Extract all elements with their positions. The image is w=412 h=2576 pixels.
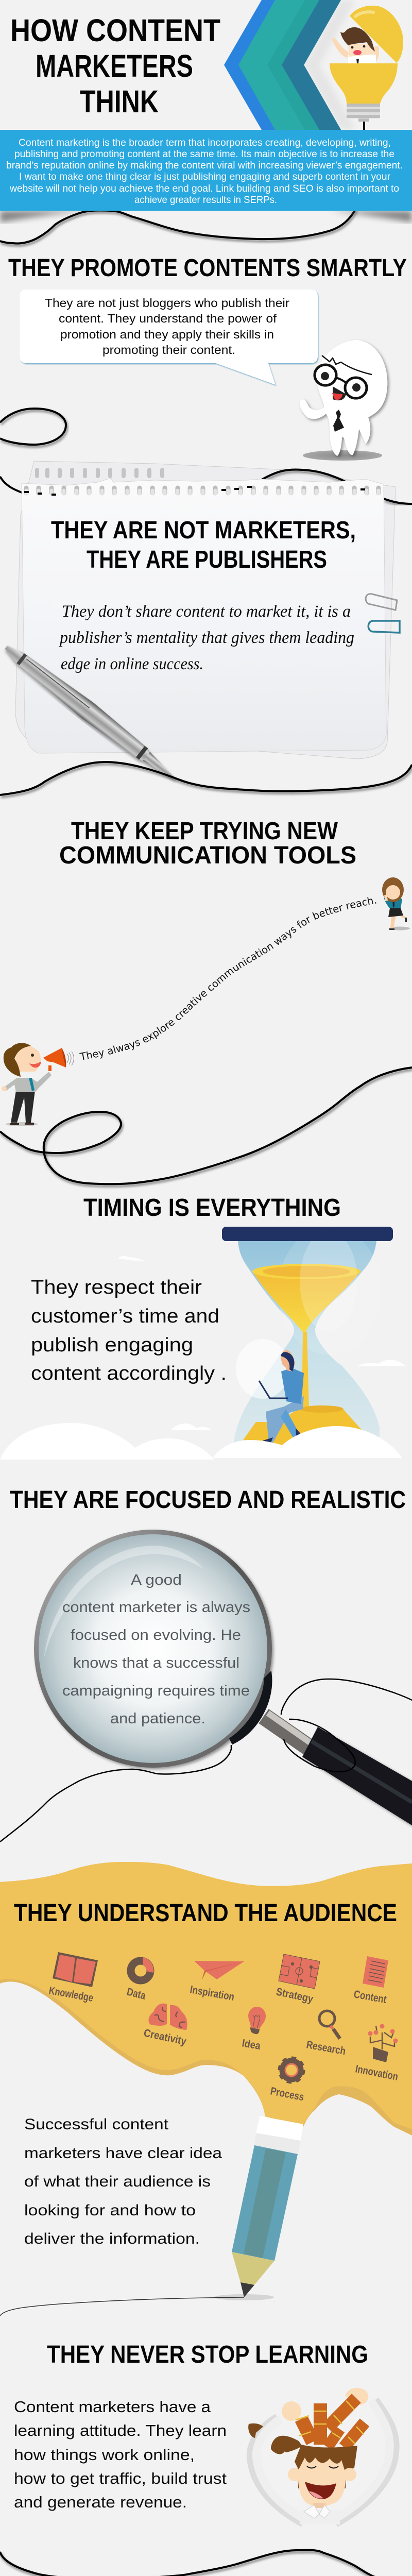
learning text: how things work online, bbox=[14, 2446, 195, 2464]
intro text: publishing and promoting content at the same time. Its main objective is to increase the bbox=[14, 149, 394, 160]
icon: white mascot with glasses bbox=[300, 340, 387, 461]
icon: paper clips bbox=[366, 594, 400, 633]
icon: process gear bbox=[269, 2058, 305, 2104]
icon: knowledge book: Knowledge bbox=[48, 1985, 94, 2004]
wire around magnifier bbox=[0, 1679, 412, 1842]
timing text: customer’s time and bbox=[31, 1306, 219, 1327]
intro text: achieve greater results in SERPs. bbox=[134, 195, 277, 206]
icon: creativity brain: Creativity bbox=[143, 2027, 187, 2047]
learning text: learning attitude. They learn bbox=[14, 2421, 227, 2439]
magnifier text bbox=[62, 1572, 250, 1727]
main title: THINK bbox=[80, 84, 159, 119]
icon: inspiration plane bbox=[189, 1961, 244, 2003]
bubble text: promotion and they apply their skills in bbox=[60, 328, 274, 341]
audience text: looking for and how to bbox=[24, 2202, 196, 2219]
audience text: Successful content bbox=[24, 2116, 169, 2133]
learning text: Content marketers have a bbox=[14, 2398, 211, 2416]
icon: idea bulb: Idea bbox=[241, 2037, 262, 2052]
heading: tools: COMMUNICATION TOOLS bbox=[59, 842, 356, 869]
notepaper script text: They don’t share content to market it, it is a bbox=[62, 602, 351, 621]
magnifier text: content marketer is always bbox=[62, 1599, 250, 1616]
notepaper heading: THEY ARE NOT MARKETERS, bbox=[51, 517, 356, 544]
icon: strategy field: Strategy bbox=[275, 1986, 314, 2005]
panel: intro band bbox=[0, 130, 412, 211]
icon: knowledge book bbox=[48, 1952, 98, 2004]
icon: content document: Content bbox=[353, 1988, 387, 2006]
icon: strategy field bbox=[275, 1954, 320, 2005]
illustration: man with books in head bbox=[248, 2388, 394, 2524]
audience text bbox=[24, 2116, 222, 2247]
icon: process gear: Process bbox=[269, 2085, 305, 2104]
heading: tools: THEY KEEP TRYING NEW bbox=[71, 818, 338, 845]
heading: tools bbox=[59, 818, 356, 869]
timing text: content accordingly . bbox=[31, 1363, 227, 1384]
icon: creativity brain bbox=[143, 2004, 187, 2047]
icon: innovation plant: Innovation bbox=[354, 2063, 399, 2083]
learning text bbox=[14, 2398, 227, 2511]
notepaper script text: edge in online success. bbox=[61, 655, 203, 673]
magnifier text: focused on evolving. He bbox=[71, 1627, 241, 1643]
learning text: how to get traffic, build trust bbox=[14, 2469, 227, 2487]
illustration: pencil bbox=[0, 2116, 303, 2316]
intro text bbox=[6, 138, 403, 206]
icon: light bulb with man bbox=[330, 6, 403, 131]
notepaper heading bbox=[51, 517, 356, 573]
magnifier text: A good bbox=[131, 1572, 182, 1588]
cable: mid bbox=[0, 762, 412, 795]
audience text: of what their audience is bbox=[24, 2173, 211, 2190]
bubble text bbox=[45, 296, 289, 357]
panel: yellow splash bbox=[0, 1862, 412, 2136]
icon: woman waving bbox=[382, 877, 410, 930]
notepaper heading: THEY ARE PUBLISHERS bbox=[87, 546, 327, 573]
cable: top bbox=[0, 209, 356, 243]
notepaper script text: publisher’s mentality that gives them leading bbox=[59, 629, 354, 647]
cable: lower bbox=[0, 2550, 412, 2576]
heading: timing: TIMING IS EVERYTHING bbox=[83, 1194, 341, 1222]
main title: MARKETERS bbox=[36, 48, 193, 83]
curved text: They always explore creative communication ways for better reach. bbox=[79, 897, 376, 1060]
heading: learning: THEY NEVER STOP LEARNING bbox=[47, 2341, 368, 2368]
bubble text: They are not just bloggers who publish their bbox=[45, 296, 289, 310]
icon: data donut bbox=[126, 1957, 153, 2002]
timing text bbox=[31, 1277, 227, 1384]
main title bbox=[10, 13, 220, 119]
intro text: I want to make one thing clear is just publishing engaging and superb content in your bbox=[19, 172, 391, 182]
magnifier text: campaigning requires time bbox=[62, 1683, 250, 1699]
icon: man with megaphone bbox=[2, 1043, 74, 1126]
icon: inspiration plane: Inspiration bbox=[189, 1984, 235, 2003]
panel: notepaper bbox=[0, 461, 412, 759]
bubble text: content. They understand the power of bbox=[59, 312, 277, 325]
magnifier text: knows that a successful bbox=[73, 1655, 239, 1671]
audience text: marketers have clear idea bbox=[24, 2145, 222, 2162]
clouds bbox=[0, 1256, 405, 1460]
icon: idea bulb bbox=[241, 2007, 266, 2052]
cable: loop left bbox=[0, 409, 66, 445]
timing text: They respect their bbox=[31, 1277, 202, 1298]
icon: research magnifier bbox=[305, 2011, 347, 2057]
illustration: hourglass bbox=[222, 1226, 393, 1450]
icon: content document bbox=[353, 1956, 388, 2006]
notepaper script text bbox=[59, 602, 354, 673]
speech bubble bbox=[20, 290, 318, 385]
band shadow bbox=[0, 211, 412, 223]
icon: pen bbox=[0, 639, 182, 787]
bubble text: promoting their content. bbox=[102, 343, 235, 357]
icon: data donut: Data bbox=[126, 1986, 147, 2002]
magnifier text: and patience. bbox=[110, 1710, 205, 1727]
timing text: publish engaging bbox=[31, 1334, 193, 1356]
cable: loop bbox=[0, 1067, 412, 1184]
intro text: brand’s reputation online by making the content viral with increasing viewer’s engagement. bbox=[6, 160, 403, 171]
intro text: Content marketing is the broader term that incorporates creating, developing, writing, bbox=[19, 138, 391, 148]
header chevrons bbox=[224, 0, 355, 130]
audience text: deliver the information. bbox=[24, 2230, 200, 2247]
illustration: magnifying glass bbox=[34, 1530, 412, 1825]
learning text: and generate revenue. bbox=[14, 2493, 187, 2511]
intro text: website will not help you achieve the end goal. Link building and SEO is also important to bbox=[9, 183, 399, 194]
main title: HOW CONTENT bbox=[10, 13, 220, 48]
icon: innovation plant bbox=[354, 2024, 399, 2083]
icon: research magnifier: Research bbox=[305, 2039, 347, 2057]
